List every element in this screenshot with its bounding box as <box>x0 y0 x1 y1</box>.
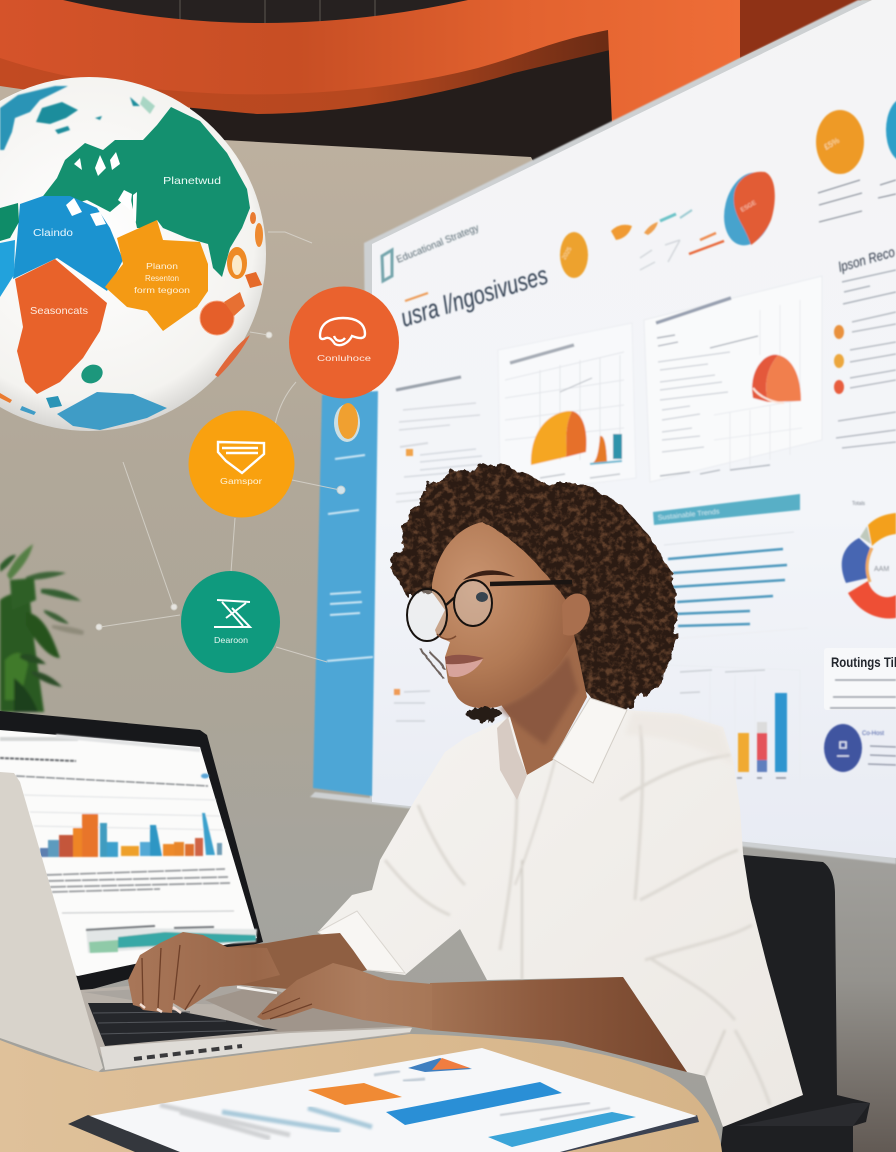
orange header badge <box>560 232 588 278</box>
table <box>0 1034 722 1152</box>
hand right <box>257 963 432 1030</box>
red and blue header badge: ESGE <box>740 200 757 214</box>
nose shading <box>437 634 456 639</box>
left lens <box>407 589 447 641</box>
eyebrow <box>463 570 515 580</box>
orange continent <box>105 220 208 331</box>
chart heading: Sustainable Trends <box>657 508 720 522</box>
lips <box>445 655 484 677</box>
hair mass <box>390 463 677 713</box>
upper shoulder tint <box>625 712 733 765</box>
globe: form tegoon <box>134 286 190 295</box>
red continent <box>15 259 107 394</box>
donut centre label: AAM <box>874 566 889 573</box>
left hand nails <box>140 1004 181 1013</box>
report sheet <box>90 1048 697 1152</box>
icon: dome glyph <box>320 318 365 345</box>
icon badge: orange <box>289 286 399 398</box>
small header marks <box>611 210 724 270</box>
shirt folds <box>385 725 770 1105</box>
face <box>432 522 575 708</box>
orange ceiling swoosh <box>0 0 740 124</box>
collar <box>497 698 627 800</box>
icon: tray glyph <box>218 442 264 473</box>
left hand finger creases <box>142 945 200 1010</box>
rolled cuff <box>318 911 405 973</box>
hand left <box>128 932 280 1013</box>
islands <box>0 212 263 415</box>
laptop bezel <box>0 711 263 992</box>
hair curl below chin <box>466 707 502 721</box>
logo mark <box>382 250 392 281</box>
west green continent <box>0 203 19 241</box>
woman <box>128 463 803 1127</box>
globe sphere <box>0 77 266 431</box>
laptop <box>0 711 412 1072</box>
orange top badge: £5% <box>822 136 841 152</box>
globe: Planon <box>146 262 178 271</box>
report binder edge <box>68 1115 190 1152</box>
antarctic land <box>57 392 167 430</box>
blue top badge <box>886 98 896 162</box>
board header <box>382 98 896 333</box>
bridge <box>446 597 455 605</box>
orange header badge: 2025 <box>562 246 574 261</box>
title accent <box>405 293 428 301</box>
icon: cross-stand glyph <box>214 600 250 627</box>
icon badge: green <box>181 571 280 673</box>
right column notes <box>834 243 896 448</box>
globe labels: Planetwud <box>163 175 221 187</box>
swoosh front <box>0 0 740 124</box>
donut chart: Totals <box>852 501 866 507</box>
badge label: Gamspor <box>220 476 262 486</box>
temple hair <box>483 490 600 605</box>
ear <box>562 594 590 636</box>
right hand finger creases <box>262 998 312 1019</box>
west blue continent <box>0 240 15 297</box>
keyboard <box>88 1003 278 1046</box>
shirt body <box>318 700 803 1127</box>
board subtitle: Educational Strategy <box>395 223 481 266</box>
connector lines between icons <box>96 232 345 662</box>
eye <box>476 592 488 602</box>
card: left text <box>396 377 482 502</box>
forearm right <box>430 977 687 1072</box>
donut chart <box>842 501 896 619</box>
infographic wall board <box>310 0 896 864</box>
teal horizontal bar chart <box>653 494 808 640</box>
board white panel <box>372 0 896 858</box>
column chart <box>665 665 800 785</box>
globe: Resenton <box>145 274 179 283</box>
globe: Claindo <box>33 228 74 239</box>
curls under glasses <box>420 648 445 678</box>
ocean-blue continent <box>13 196 123 291</box>
laptop bar chart <box>40 813 222 857</box>
tips panel <box>824 648 896 710</box>
navy badge with notes <box>824 724 896 772</box>
office chair <box>720 855 870 1152</box>
card: red dome chart <box>644 276 822 482</box>
keyboard deck <box>80 975 412 1068</box>
neck shadow <box>498 655 578 745</box>
badge captions <box>818 180 896 222</box>
forearm left <box>227 933 367 990</box>
icon badge: amber <box>188 410 294 518</box>
red and blue header badge <box>717 167 781 251</box>
asia continent <box>40 107 250 277</box>
arctic land <box>0 86 155 150</box>
navy badge with notes: Co-Host <box>862 731 884 737</box>
lower-left board notes <box>394 689 430 721</box>
potted plant leaves <box>0 544 84 712</box>
glasses <box>407 580 572 641</box>
neck <box>490 630 587 775</box>
swoosh underside <box>0 25 610 114</box>
bars <box>592 436 607 463</box>
laptop lower chart <box>86 928 257 953</box>
paper report on table <box>68 1048 699 1152</box>
board surface <box>310 0 896 864</box>
globe <box>0 77 266 431</box>
dome chart <box>531 411 572 465</box>
laptop screen <box>0 730 257 976</box>
temple arm <box>490 582 572 584</box>
laptop front edge <box>100 1028 412 1070</box>
blue side panel <box>313 391 378 796</box>
board title: usra l/ngosivuses <box>397 260 551 333</box>
notes bullets <box>834 325 844 339</box>
card: yellow dome chart <box>498 323 636 494</box>
badge label: Dearoon <box>214 635 248 645</box>
dome chart <box>752 355 778 402</box>
right lens <box>454 580 492 626</box>
globe: Seasoncats <box>30 305 88 317</box>
orange top badge <box>816 110 864 174</box>
badge label: Conluhoce <box>317 353 371 363</box>
second laptop lid <box>0 772 103 1072</box>
